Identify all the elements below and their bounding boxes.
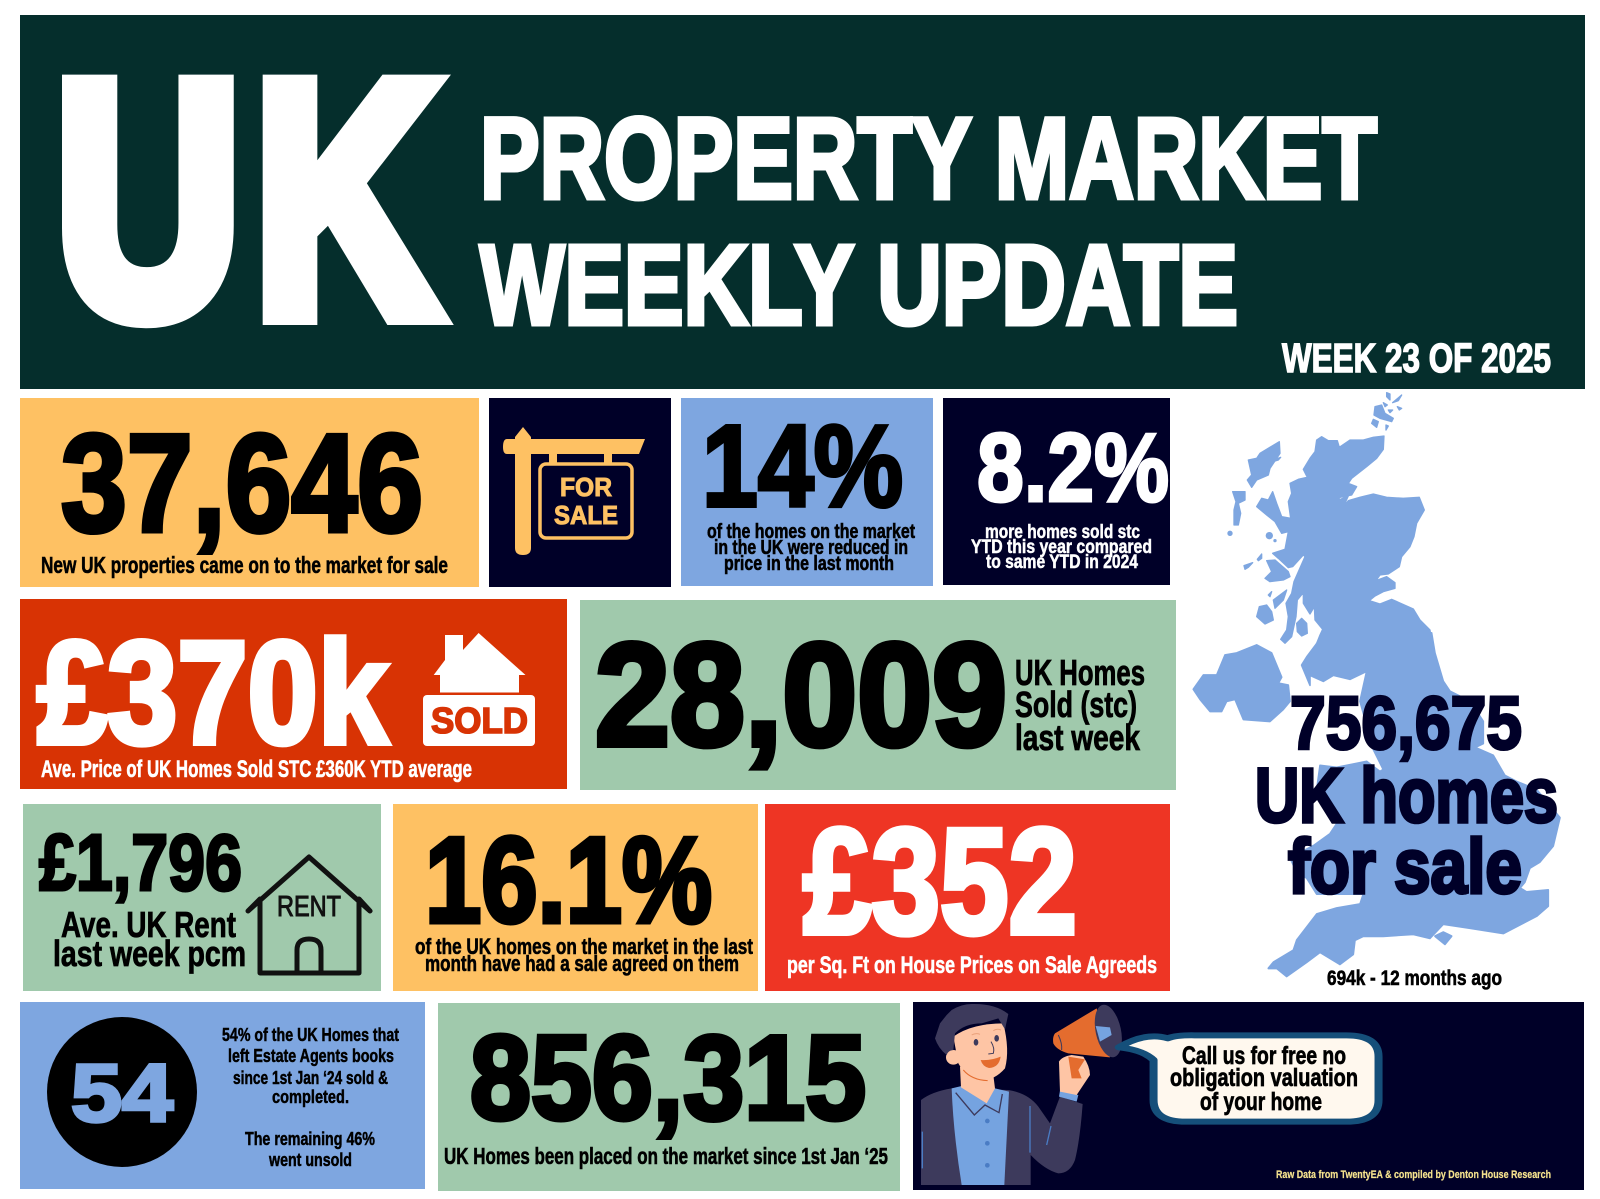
panel: homes placed on market [438,1003,900,1191]
speech bubble text: obligation valuation [1170,1064,1358,1092]
speech bubble text: Call us for free no [1182,1042,1346,1070]
map of the UK [1193,393,1560,976]
speech bubble text [1170,1042,1358,1116]
caption: YTD this year compared [971,537,1152,558]
panel: homes sold last week [580,600,1176,790]
caption [971,522,1152,573]
description: since 1st Jan ‘24 sold & [233,1068,388,1088]
caption [707,521,915,575]
icon: sold house: SOLD [431,700,528,741]
caption: in the UK were reduced in [714,537,908,559]
speech bubble text: of your home [1200,1088,1322,1116]
number: £370k: £370k [37,611,389,774]
caption: price in the last month [724,553,894,575]
badge: 54: 54 [71,1048,173,1139]
number: 8.2%: 8.2% [977,413,1169,522]
number: 16.1%: 16.1% [425,812,712,948]
caption: last week pcm [53,933,246,974]
caption: UK Homes [1015,652,1145,693]
panel: homes sold YTD [943,398,1170,585]
icon: for sale sign: FOR [560,472,612,502]
speech bubble [1119,1035,1379,1122]
icon: for sale sign: SALE [554,500,618,530]
panel: sale agreed share [393,804,758,991]
caption: month have had a sale agreed on them [425,951,739,976]
caption: Ave. Price of UK Homes Sold STC £360K YTD average [41,756,472,783]
number: £352: £352 [803,797,1077,965]
title: property market: PROPERTY MARKET [480,95,1377,223]
panel: percentage sold [20,1002,425,1189]
title: UK: U [56,15,240,383]
icon: rent house: RENT [277,891,341,923]
header panel [20,15,1585,389]
description: left Estate Agents books [228,1046,394,1066]
caption: Ave. UK Rent [61,904,236,945]
panel: average rent [23,804,381,991]
headline: homes for sale [1255,681,1558,910]
caption: last week [1015,717,1141,758]
number: 856,315: 856,315 [470,1011,866,1145]
caption: of the homes on the market [707,521,915,543]
headline: homes for sale: 756,675 [1290,681,1522,765]
description: 54% of the UK Homes that [222,1025,399,1045]
number: 37,646: 37,646 [61,406,423,561]
caption [53,904,246,974]
title: weekly update: WEEKLY UPDATE [480,222,1238,348]
caption: of the UK homes on the market in the last [415,934,754,959]
caption: Sold (stc) [1015,684,1137,725]
icon: rent house [248,857,370,973]
panel: new properties [20,398,479,587]
illustration: man with megaphone [921,1002,1126,1185]
description: completed. [272,1087,349,1107]
headline: homes for sale: for sale [1288,824,1522,910]
panel: price per square foot [765,797,1170,991]
description: The remaining 46% [245,1129,375,1149]
panel: average price [20,599,567,789]
number: 28,009: 28,009 [595,613,1007,776]
panel: call to action [913,1002,1584,1190]
caption [415,934,754,976]
description: went unsold [268,1150,352,1170]
caption: New UK properties came on to the market for sale [41,552,448,578]
icon: for sale sign [503,427,645,555]
caption: 12 months ago: 694k - 12 months ago [1327,967,1502,990]
caption: more homes sold stc [985,522,1140,543]
number: £1,796: £1,796 [39,818,242,907]
panel: for sale sign [489,398,671,587]
caption [1015,652,1145,758]
badge: 54 [47,1017,197,1167]
number: 14%: 14% [702,401,903,531]
caption: to same YTD in 2024 [986,552,1138,573]
description [222,1025,399,1170]
caption: per Sq. Ft on House Prices on Sale Agreeds [787,952,1157,979]
panel: price reductions [681,398,933,586]
icon: sold house [423,633,535,746]
caption: UK Homes been placed on the market since 1st Jan ‘25 [444,1143,888,1169]
title: UK: K [255,15,437,383]
